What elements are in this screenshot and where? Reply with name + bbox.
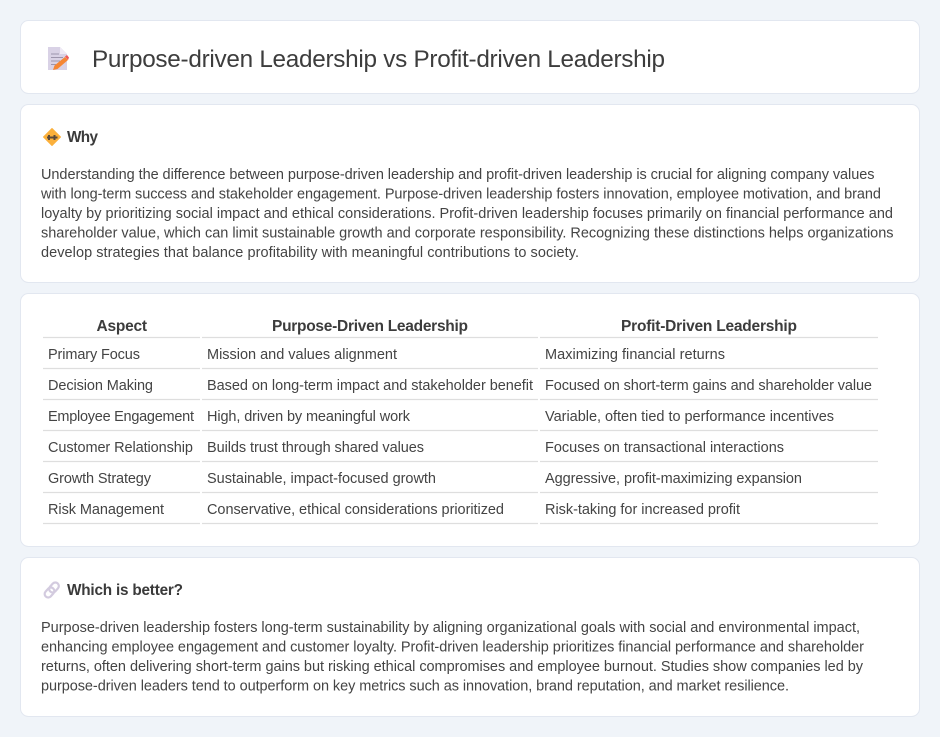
row: primary focus: Maximizing financial returns: [545, 347, 725, 363]
text block: which is better paragraph: returns, often delivering short-term gains but risking ethical compromises and employee burnout. Studies show companies led by: [41, 659, 864, 675]
table rules: [43, 338, 878, 524]
text block: which is better paragraph: [41, 620, 864, 694]
row: customer relationship: Builds trust through shared values: [207, 440, 424, 456]
row: employee engagement: Employee Engagement: [48, 409, 194, 425]
table header: Profit-Driven Leadership: [621, 318, 797, 335]
panel: comparison table: [20, 294, 920, 546]
row: primary focus: Primary Focus: [48, 347, 140, 363]
heading: which is better: Which is better?: [67, 582, 183, 599]
row: customer relationship: Customer Relationship: [48, 440, 193, 456]
row: decision making: [48, 378, 872, 394]
icon: chain link: [43, 581, 60, 599]
text block: why paragraph: develop strategies that balance profitability with meaningful contributions to society.: [41, 245, 579, 261]
panel: which is better: [20, 558, 920, 716]
text block: which is better paragraph: enhancing employee engagement and customer loyalty. Profit-driven leadership prioritizes financial performance and shareholder: [41, 640, 864, 656]
row: decision making: Focused on short-term gains and shareholder value: [545, 378, 872, 394]
row: primary focus: [48, 347, 725, 363]
table header: [96, 318, 797, 335]
text block: which is better paragraph: purpose-driven leaders tend to outperform on key metrics such as innovation, brand reputation, and market resilience.: [41, 678, 789, 694]
row: growth strategy: Aggressive, profit-maximizing expansion: [545, 471, 802, 487]
row: employee engagement: [48, 409, 834, 425]
row: decision making: Based on long-term impact and stakeholder benefit: [207, 378, 533, 394]
row: customer relationship: [48, 440, 784, 456]
row: decision making: Decision Making: [48, 378, 153, 394]
row: growth strategy: Growth Strategy: [48, 471, 152, 487]
row: growth strategy: [48, 471, 802, 487]
panel: why: [20, 104, 920, 282]
text block: why paragraph: shareholder value, which can limit sustainable growth and corporate responsibility. Recognizing these distinctions helps organizations: [41, 226, 894, 242]
text block: why paragraph: with long-term success and stakeholder engagement. Purpose-driven leadership fosters innovation, employee motivation, and brand: [40, 186, 881, 202]
row: risk management: Risk-taking for increased profit: [545, 502, 740, 518]
text block: which is better paragraph: Purpose-driven leadership fosters long-term sustainability by aligning organizational goals with social and environmental impact,: [41, 620, 860, 636]
row: risk management: Risk Management: [48, 502, 164, 518]
row: risk management: Conservative, ethical considerations prioritized: [207, 502, 504, 518]
table header: Aspect: [96, 318, 147, 335]
row: growth strategy: Sustainable, impact-focused growth: [207, 471, 436, 487]
text block: why paragraph: [40, 167, 894, 261]
table header: Purpose-Driven Leadership: [272, 318, 468, 335]
row: risk management: [48, 502, 740, 518]
text block: why paragraph: loyalty by prioritizing social impact and ethical considerations. Profit-driven leadership focuses primarily on financial performance and: [41, 206, 893, 222]
heading: why: Why: [67, 129, 98, 146]
title: Purpose-driven Leadership vs Profit-driven Leadership: [92, 46, 665, 73]
icon: document with pencil: [48, 47, 69, 70]
row: primary focus: Mission and values alignment: [207, 347, 397, 363]
icon: diamond sign: [44, 128, 60, 146]
panel: title header: [20, 20, 920, 94]
row: customer relationship: Focuses on transactional interactions: [545, 440, 784, 456]
row: employee engagement: Variable, often tied to performance incentives: [545, 409, 834, 425]
row: employee engagement: High, driven by meaningful work: [207, 409, 411, 425]
text block: why paragraph: Understanding the difference between purpose-driven leadership and profit-driven leadership is crucial for aligning company values: [41, 167, 874, 183]
